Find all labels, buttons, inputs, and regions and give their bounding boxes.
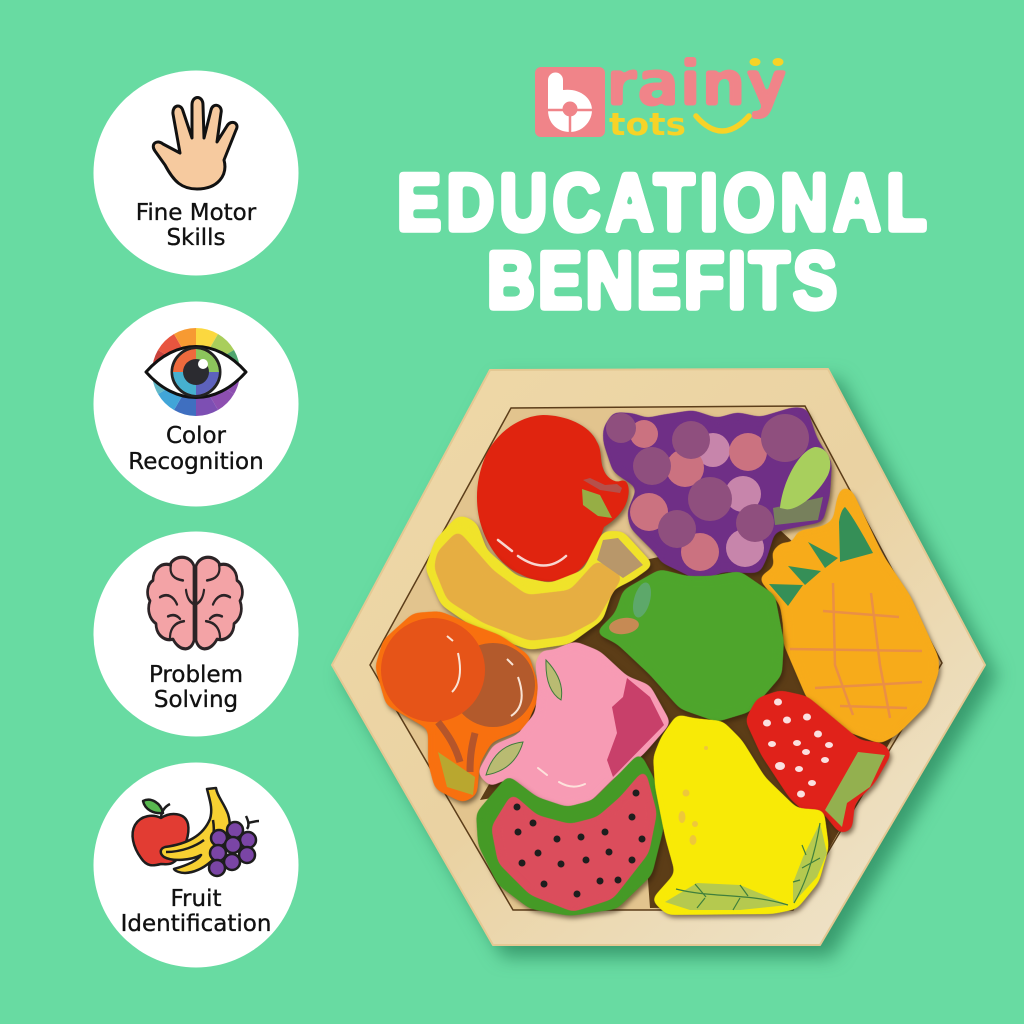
- logo smile: [696, 116, 749, 131]
- piece: pink peach: [477, 641, 671, 809]
- label: Skills: [166, 225, 226, 251]
- label: [128, 423, 264, 475]
- title: EDUCATIONAL: [397, 157, 927, 247]
- logo: Brainy Tots: [535, 47, 787, 143]
- piece: strawberry: [745, 690, 892, 834]
- puzzle frame: [332, 369, 985, 945]
- panel: fruit identification: [94, 762, 298, 968]
- icon: rainbow eye: [146, 328, 246, 416]
- label: Problem: [149, 662, 243, 688]
- label: Fruit: [170, 886, 222, 912]
- label: Identification: [121, 911, 271, 937]
- label: Recognition: [128, 449, 264, 475]
- puzzle recess: [370, 406, 942, 910]
- label: [149, 662, 243, 713]
- wooden puzzle: [332, 369, 985, 945]
- icon: hand: [153, 98, 237, 189]
- panel: fine motor skills: [94, 70, 298, 276]
- label: Color: [166, 423, 227, 449]
- piece: apple: [477, 415, 629, 582]
- panel: color recognition: [94, 302, 298, 506]
- piece: yellow pear: [651, 714, 829, 915]
- piece: banana: [425, 516, 654, 650]
- piece: watermelon: [476, 752, 664, 916]
- logo subtitle: tots: tots: [609, 107, 686, 143]
- title: [397, 157, 927, 325]
- logo badge: [535, 67, 605, 137]
- logo dots: [750, 58, 784, 66]
- label: [136, 200, 257, 251]
- label: Solving: [154, 687, 238, 713]
- panel: problem solving: [94, 532, 298, 736]
- piece: grapes: [603, 407, 832, 582]
- label: [121, 886, 271, 937]
- piece: green pear: [595, 569, 784, 722]
- title: BENEFITS: [487, 235, 837, 325]
- icon: brain: [148, 557, 242, 649]
- label: Fine Motor: [136, 200, 257, 226]
- icon: fruits: [133, 788, 259, 876]
- logo wordmark: rainy: [606, 47, 787, 120]
- piece: orange: [375, 611, 541, 803]
- piece: pineapple: [758, 486, 939, 744]
